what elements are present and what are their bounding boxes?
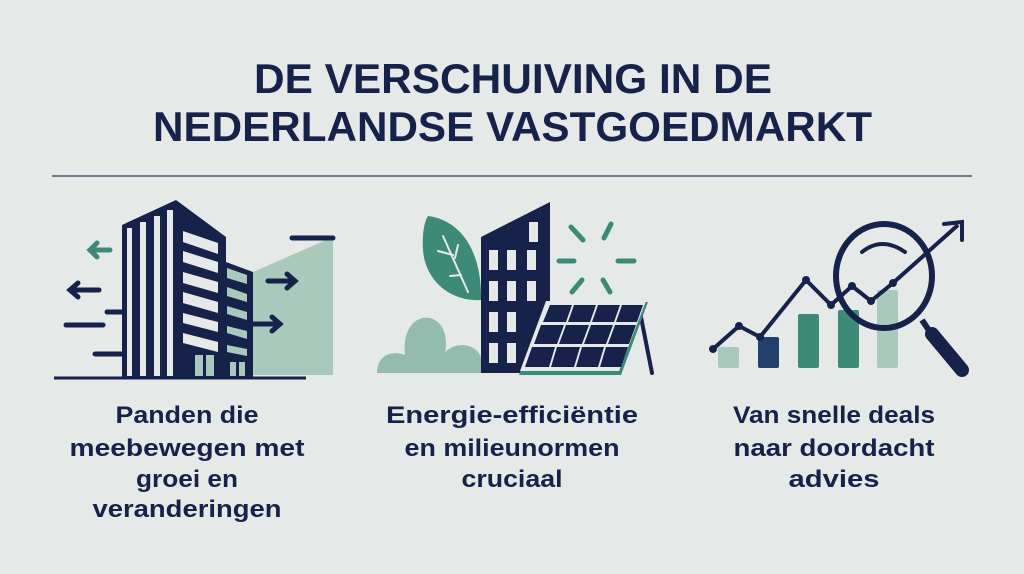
caption: column 2: en milieunormen	[404, 435, 620, 462]
caption: column 2: cruciaal	[462, 466, 562, 493]
caption: column 3	[733, 402, 935, 493]
caption: column 3: Van snelle deals	[733, 402, 935, 429]
icon: energy efficiency	[377, 202, 652, 375]
caption: column 2: Energie-efficiëntie	[386, 402, 638, 429]
icon: chart with magnifier	[709, 222, 962, 370]
caption: column 1: veranderingen	[92, 496, 282, 523]
caption: column 1: meebewegen met	[70, 435, 305, 462]
caption: column 3: naar doordacht	[734, 435, 934, 462]
title: NEDERLANDSE VASTGOEDMARKT	[153, 103, 872, 150]
caption: column 2	[386, 402, 638, 493]
caption: column 1: groei en	[136, 466, 238, 493]
caption: column 3: advies	[788, 466, 880, 493]
title	[153, 55, 872, 150]
title: DE VERSCHUIVING IN DE	[254, 55, 772, 102]
icon: building with arrows	[54, 200, 333, 378]
caption: column 1	[70, 402, 305, 523]
caption: column 1: Panden die	[116, 402, 258, 429]
